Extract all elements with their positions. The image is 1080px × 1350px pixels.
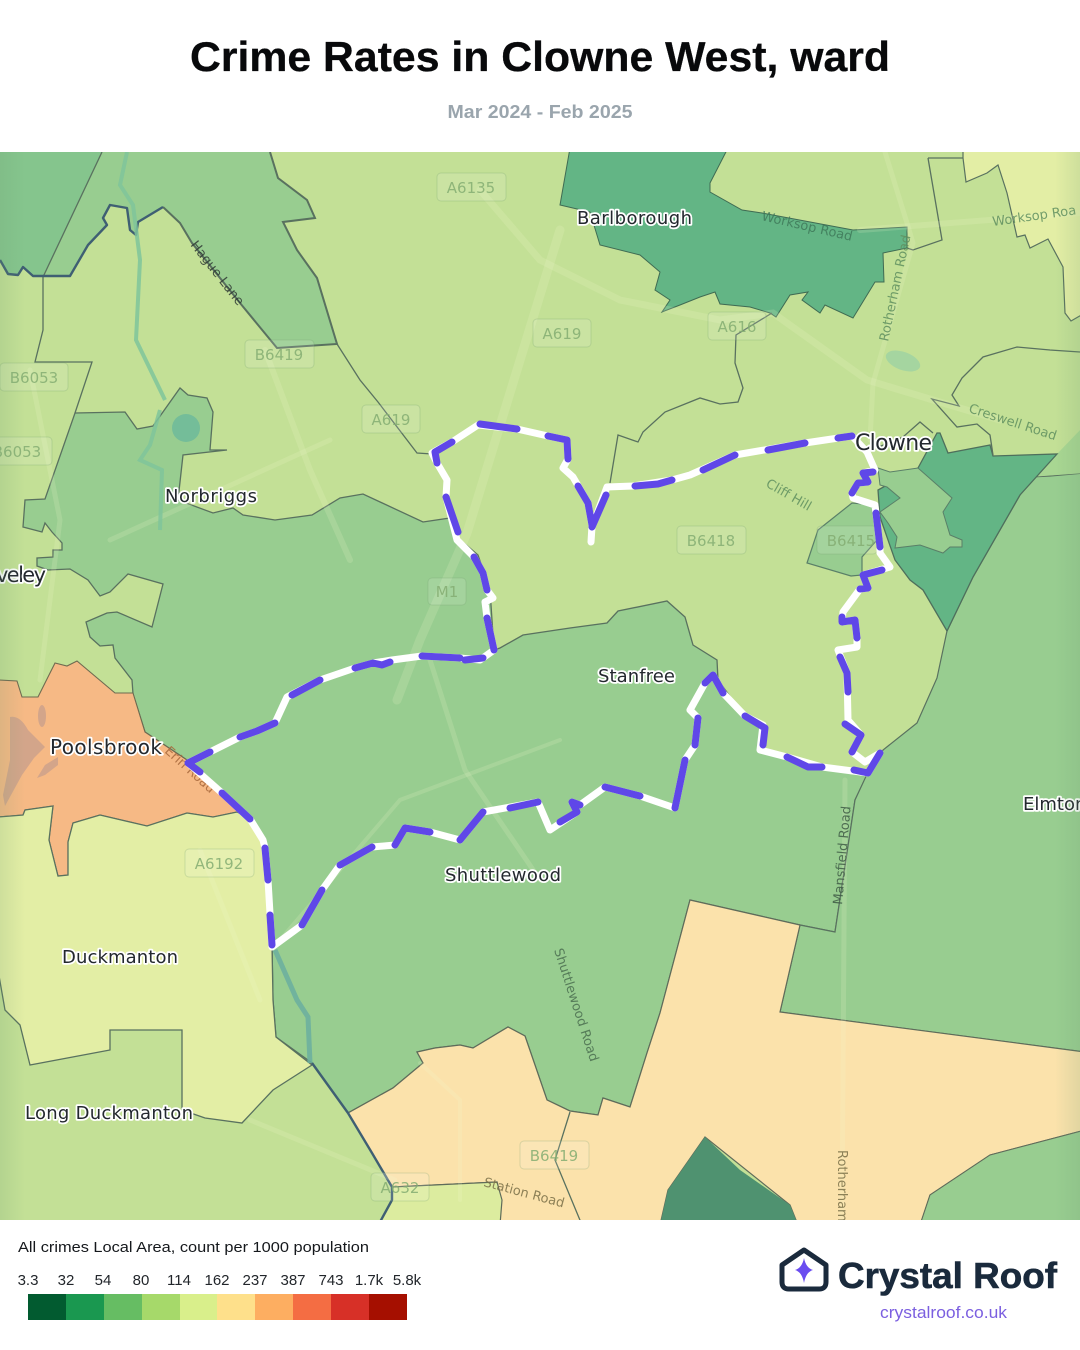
road labels: B6418: [687, 532, 735, 550]
street labels: Cliff Hill: [763, 476, 814, 514]
legend: [18, 1239, 422, 1320]
region: north-east pale: [963, 148, 1080, 321]
street labels: Rotherham: [834, 1150, 849, 1222]
legend values: 80: [133, 1272, 149, 1289]
roads and motorway: [30, 152, 1080, 1220]
region: north-east strip: [1038, 430, 1080, 476]
legend values: 1.7k: [355, 1272, 384, 1289]
street labels: Mansfield Road: [831, 805, 855, 905]
road labels: A632: [381, 1179, 419, 1197]
street labels: Station Road: [482, 1175, 566, 1211]
legend values: [18, 1272, 422, 1289]
rivers and lake: [120, 152, 310, 1063]
street labels: Rotherham Road: [877, 234, 914, 343]
legend values: 162: [204, 1272, 230, 1289]
street labels: [161, 203, 1077, 1222]
region: Norbriggs, Shuttlewood and Stanfree mid green: [23, 388, 868, 1115]
region: B6415 small: [807, 503, 877, 576]
subtitle: date range: Mar 2024 - Feb 2025: [448, 102, 632, 122]
street labels: Shuttlewood Road: [550, 947, 601, 1064]
road labels: M1: [436, 583, 458, 601]
place labels: Clowne: [855, 431, 932, 456]
orange inner feature: [3, 705, 58, 806]
map panel: [0, 148, 1080, 1225]
region: southern tan: [348, 900, 1080, 1225]
region: eastern mid green: [780, 473, 1080, 1052]
icon: house with star: [782, 1250, 826, 1289]
region: Barlborough dark green: [560, 148, 907, 318]
place labels: Poolsbrook: [50, 735, 162, 759]
region: A632 pale: [382, 1181, 503, 1220]
road labels: A616: [718, 318, 756, 336]
street labels: Hague Lane: [187, 238, 247, 309]
road labels: B6415: [827, 532, 875, 550]
road labels: [0, 179, 875, 1197]
ward boundary: Clowne West: [188, 424, 890, 947]
place labels: Shuttlewood: [445, 865, 561, 886]
road labels: A6135: [447, 179, 495, 197]
logo: Crystal Roof: [782, 1250, 1058, 1322]
place labels: Barlborough: [577, 208, 692, 229]
legend values: 32: [58, 1272, 74, 1289]
legend values: 387: [280, 1272, 306, 1289]
place labels: Duckmanton: [62, 947, 178, 968]
region: south-east green: [920, 1130, 1080, 1225]
legend values: 743: [318, 1272, 344, 1289]
logo wordmark: Crystal Roof: [838, 1255, 1058, 1296]
logo url: crystalroof.co.uk: [880, 1303, 1008, 1322]
region: south dark green: [660, 1137, 798, 1225]
street labels: Worksop Road: [760, 209, 854, 245]
legend values: 237: [242, 1272, 268, 1289]
place labels: Norbriggs: [165, 486, 257, 507]
road labels: B6419: [530, 1147, 578, 1165]
icon: pond: [886, 350, 920, 372]
street labels: Creswell Road: [967, 402, 1058, 444]
region: Clowne east inner: [878, 468, 962, 553]
icon: lake: [172, 414, 200, 442]
road labels: A6192: [195, 855, 243, 873]
street labels: Worksop Roa: [991, 203, 1077, 230]
edge vignette: [0, 260, 18, 1220]
legend values: 114: [167, 1272, 191, 1289]
region boundaries: [35, 152, 1080, 1225]
road labels: B6419: [255, 346, 303, 364]
street labels: Erin Road: [161, 744, 218, 797]
region: north-west mid green: [44, 152, 336, 347]
legend values: 5.8k: [393, 1272, 422, 1289]
road labels: B6053: [10, 369, 58, 387]
region: Clowne east dark green: [878, 433, 1057, 631]
legend values: 54: [95, 1272, 111, 1289]
county border and river boundary: [0, 205, 392, 1222]
region: far north-west darker: [0, 148, 104, 277]
road label boxes: [0, 173, 877, 1201]
legend values: 3.3: [18, 1272, 38, 1289]
road labels: A619: [372, 411, 410, 429]
place labels: Stanfree: [598, 666, 675, 687]
region: Duckmanton pale: [0, 806, 312, 1123]
region: Poolsbrook orange: [0, 661, 250, 876]
place labels: [0, 208, 1080, 1124]
place labels: Long Duckmanton: [25, 1103, 193, 1124]
legend colour scale: [28, 1294, 407, 1320]
road labels: A619: [543, 325, 581, 343]
legend title: All crimes Local Area, count per 1000 population: [18, 1239, 369, 1256]
title: Crime Rates in Clowne West, ward: [190, 33, 890, 80]
